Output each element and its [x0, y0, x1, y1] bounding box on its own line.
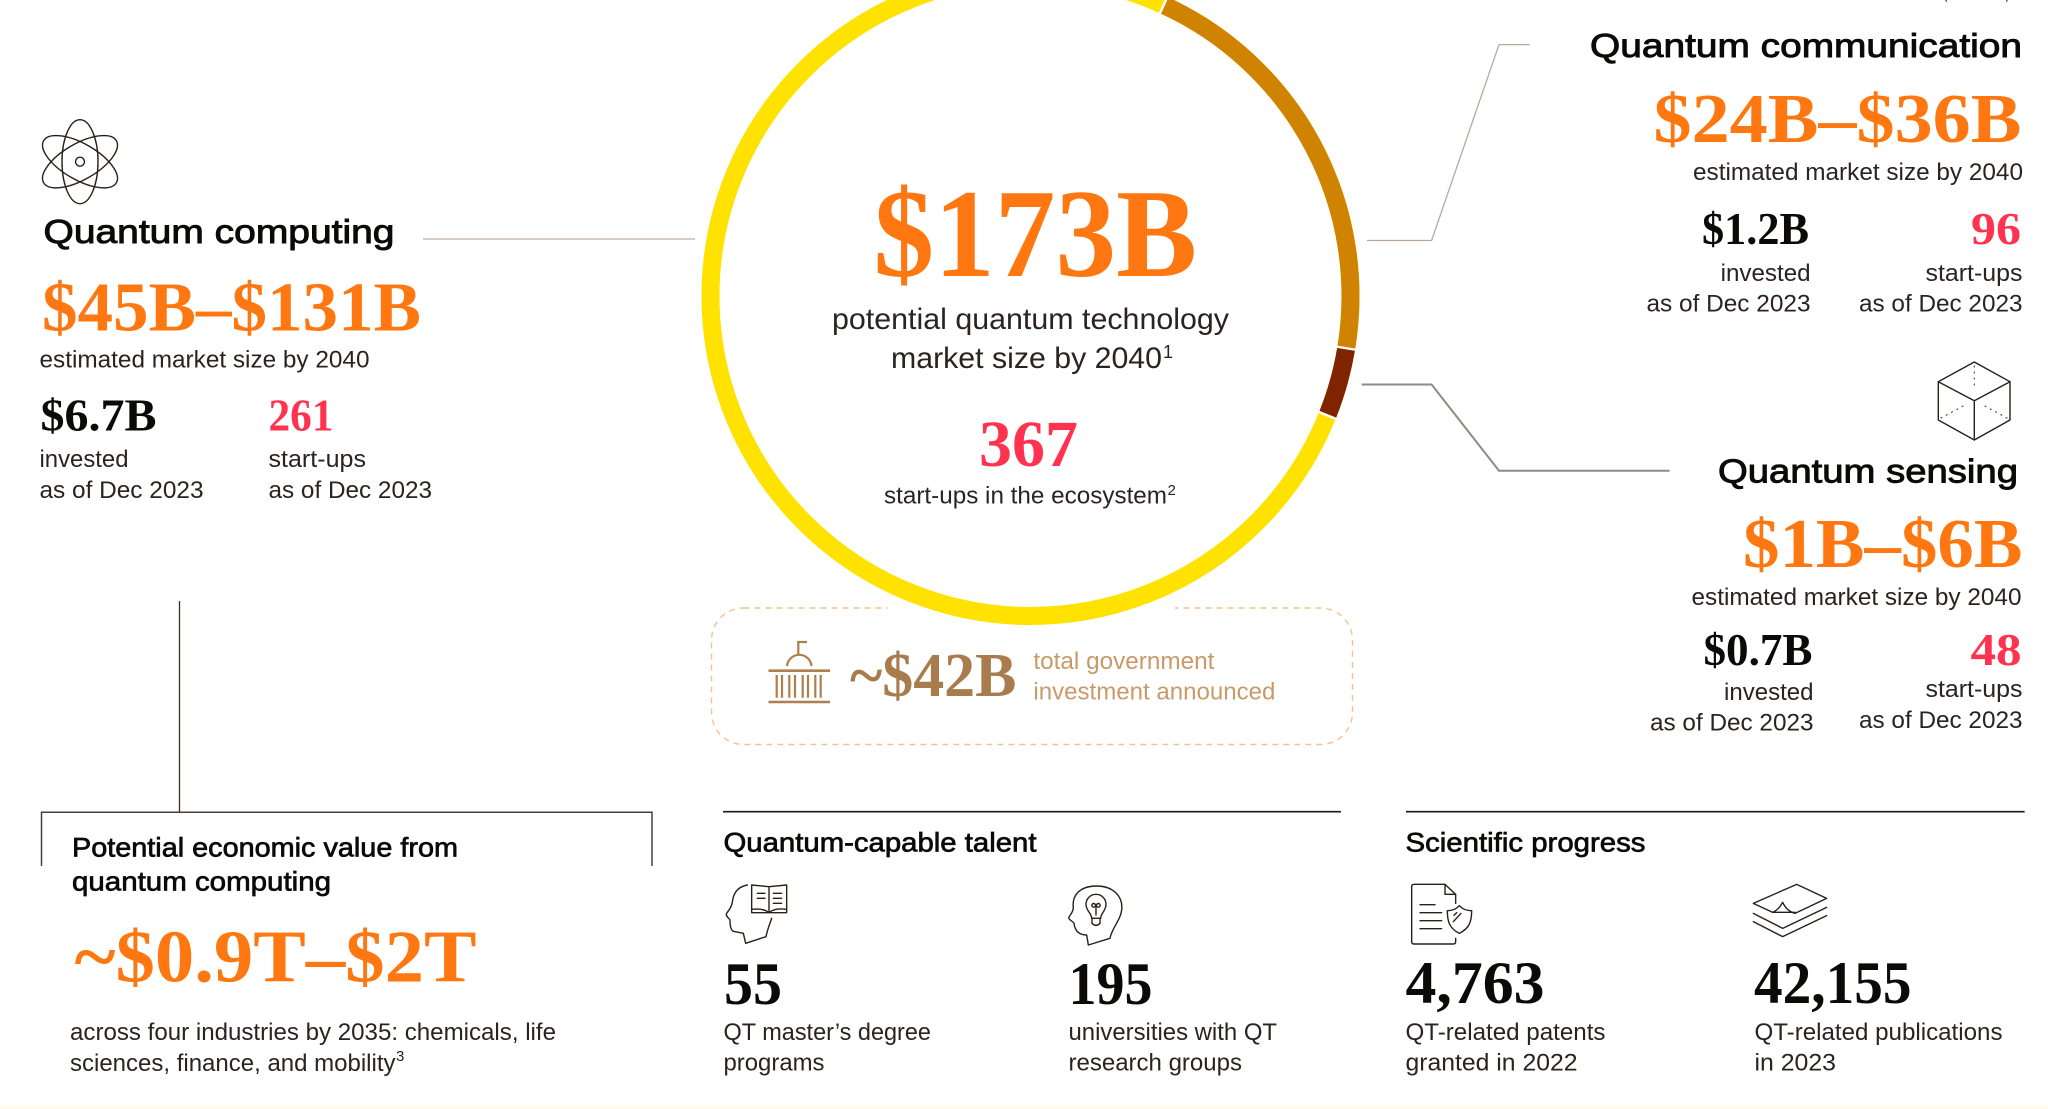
stat: sensing invested: as of Dec 2023 [1650, 710, 1814, 736]
stat: universities: universities with QT [1068, 1019, 1277, 1046]
stat: universities: 195 [1068, 951, 1152, 1017]
stat: patents: 4,763 [1406, 950, 1544, 1016]
panel: scientific progress [1406, 812, 2025, 1077]
icon: stack of papers [1753, 884, 1827, 937]
stat: invested: invested [40, 446, 128, 473]
value: government investment: ~$42B [850, 642, 1016, 710]
panel: quantum computing [35, 120, 432, 504]
connector: quantum computing to ring [423, 238, 695, 240]
connector: computing to economic value [178, 601, 180, 812]
stat: master's programs: 55 [724, 951, 782, 1017]
stat: invested [40, 390, 204, 504]
caption: economic value [70, 1019, 556, 1077]
total market caption: 1 [1163, 342, 1173, 362]
stat: communication invested: as of Dec 2023 [1646, 291, 1810, 318]
stat: start-ups: 261 [268, 390, 334, 441]
connector: communication [1367, 45, 1530, 240]
heading: quantum computing: Quantum computing [44, 213, 394, 250]
stat: communication start-ups: start-ups [1926, 260, 2022, 287]
stat: sensing start-ups [1859, 624, 2022, 734]
stat: sensing start-ups: start-ups [1926, 676, 2022, 703]
icon: head with light bulb [1069, 886, 1122, 945]
caption: communication market size: estimated market size by 2040 [1693, 159, 2023, 186]
total market value: $173B [874, 165, 1197, 304]
stat: patents: granted in 2022 [1406, 1050, 1578, 1077]
heading: quantum communication: Quantum communication [1590, 27, 2022, 64]
heading: quantum sensing: Quantum sensing [1718, 452, 2018, 489]
stat: master's programs: programs [724, 1050, 824, 1077]
stat: sensing invested: invested [1724, 679, 1814, 706]
value: sensing market size: $1B–$6B [1743, 506, 2022, 583]
total start-ups caption: 2 [1168, 482, 1176, 499]
panel: potential economic value [42, 812, 652, 1077]
caption: government investment: investment announced [1033, 678, 1275, 706]
stat: start-ups: as of Dec 2023 [268, 477, 432, 504]
total market caption [832, 303, 1229, 375]
icon: head with book [726, 885, 787, 943]
caption: economic value: sciences, finance, and mobility [70, 1050, 396, 1077]
panel: quantum communication [1590, 27, 2023, 318]
total start-ups caption: start-ups in the ecosystem [884, 482, 1167, 510]
stat: communication start-ups: as of Dec 2023 [1859, 291, 2022, 318]
icon: cube [1938, 362, 2010, 440]
icon: atom [35, 120, 125, 204]
heading: quantum-capable talent: Quantum-capable talent [724, 828, 1037, 858]
stat: start-ups [268, 390, 432, 504]
stat: publications: 42,155 [1754, 950, 1912, 1016]
stat: communication invested: invested [1721, 260, 1811, 287]
heading: scientific progress: Scientific progress [1406, 828, 1646, 858]
stat: publications [1754, 950, 2002, 1077]
heading: potential economic value: quantum computing [72, 867, 331, 897]
total start-ups value: 367 [979, 408, 1078, 481]
stat: patents [1406, 950, 1606, 1077]
caption: government investment [1033, 648, 1275, 706]
value: communication market size: $24B–$36B [1654, 81, 2022, 158]
stat: invested: $6.7B [40, 390, 156, 441]
value: economic value range: ~$0.9T–$2T [74, 917, 476, 999]
heading: potential economic value [72, 833, 458, 897]
caption: government investment: total government [1033, 648, 1215, 675]
stat: sensing start-ups: 48 [1970, 624, 2022, 675]
icon: capitol building [768, 642, 830, 702]
caption: sensing market size: estimated market size by 2040 [1692, 584, 2022, 611]
stat: communication start-ups: 96 [1971, 203, 2021, 254]
stat: sensing invested [1650, 624, 1814, 736]
stat: master's programs: QT master’s degree [724, 1019, 931, 1046]
stat: start-ups: start-ups [268, 446, 366, 473]
panel: government investment [712, 603, 1352, 744]
stat: communication invested: $1.2B [1702, 203, 1809, 254]
heading: potential economic value: Potential economic value from [72, 833, 458, 863]
stat: universities [1068, 951, 1277, 1077]
stat: sensing invested: $0.7B [1704, 624, 1812, 675]
icon: patent document with shield [1412, 884, 1472, 944]
caption: economic value: 3 [396, 1048, 404, 1065]
caption: economic value: across four industries by 2035: chemicals, life [70, 1019, 556, 1046]
stat: publications: QT-related publications [1754, 1019, 2002, 1046]
stat: universities: research groups [1068, 1050, 1242, 1077]
total market caption: market size by 2040 [891, 342, 1162, 375]
panel: quantum-capable talent [723, 812, 1341, 1077]
panel: quantum sensing [1650, 362, 2022, 736]
stat: sensing start-ups: as of Dec 2023 [1859, 707, 2022, 734]
stat: master's programs [724, 951, 931, 1077]
value: market size range: $45B–$131B [42, 270, 421, 347]
total market caption: potential quantum technology [832, 303, 1229, 336]
stat: communication start-ups [1859, 203, 2022, 318]
connector: sensing [1362, 384, 1670, 471]
chart: market size ring [710, 0, 1357, 616]
stat: communication invested [1646, 203, 1811, 318]
stat: patents: QT-related patents [1406, 1019, 1606, 1046]
stat: invested: as of Dec 2023 [40, 477, 204, 504]
stat: publications: in 2023 [1754, 1050, 1836, 1077]
caption: market size: estimated market size by 2040 [40, 346, 370, 374]
